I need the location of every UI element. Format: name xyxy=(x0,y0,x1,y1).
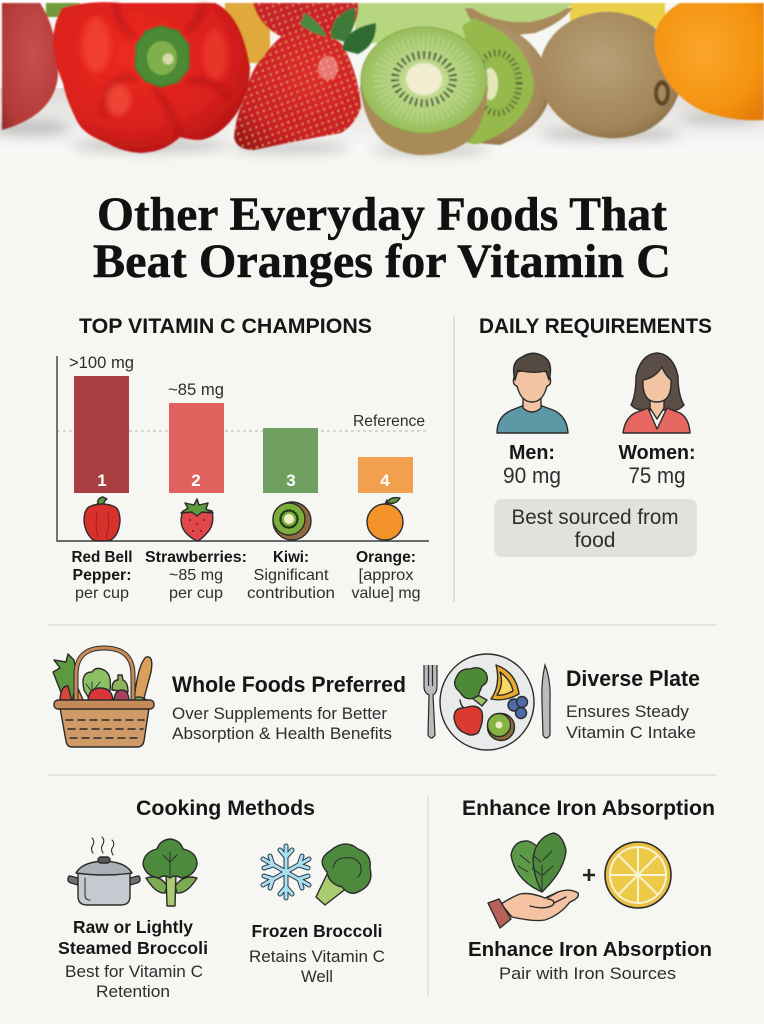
icon: red bell pepper xyxy=(84,497,120,541)
men requirement: Men: xyxy=(509,442,555,464)
bar labels: contribution xyxy=(247,585,335,602)
women requirement: Women: xyxy=(618,442,696,464)
bar labels: Kiwi: xyxy=(273,549,309,566)
bar labels: value] mg xyxy=(352,585,420,602)
icon: strawberry xyxy=(181,499,213,541)
bar labels: [approx xyxy=(358,567,414,584)
icon: steaming pot xyxy=(68,837,140,905)
heading: champions: TOP VITAMIN C CHAMPIONS xyxy=(79,315,372,338)
bar labels: Pepper: xyxy=(72,567,132,584)
heading: cooking methods: Cooking Methods xyxy=(136,796,315,820)
text: pair with iron sources: Pair with Iron Sources xyxy=(499,964,676,983)
bar chart: >100 mg xyxy=(69,353,134,372)
text: pair with iron sources xyxy=(468,939,712,983)
bar labels xyxy=(72,549,420,602)
heading: whole foods preferred: Whole Foods Preferred xyxy=(172,672,406,697)
callout: best sourced from food xyxy=(494,499,697,557)
text: raw or lightly steamed broccoli: Best for Vitamin C xyxy=(65,963,203,981)
icon: fork xyxy=(424,665,437,738)
title xyxy=(93,188,671,288)
icon: woman xyxy=(623,353,690,433)
heading: enhance iron absorption: Enhance Iron Absorption xyxy=(462,796,715,820)
text: ensures steady: Vitamin C Intake xyxy=(566,723,696,742)
icon: man xyxy=(497,353,568,433)
text: frozen broccoli: Well xyxy=(301,968,333,986)
text: pair with iron sources: Enhance Iron Absorption xyxy=(468,939,712,961)
text: frozen broccoli xyxy=(249,921,385,986)
callout: best sourced from food: food xyxy=(574,529,616,552)
panel: top vitamin C champions xyxy=(57,315,429,602)
bar chart: 3 xyxy=(286,471,296,490)
text: raw or lightly steamed broccoli: Steamed Broccoli xyxy=(58,938,208,958)
icon: basket xyxy=(53,648,154,747)
panel: diverse plate xyxy=(424,654,700,750)
women requirement: 75 mg xyxy=(628,463,686,488)
bar labels: Red Bell xyxy=(72,549,132,566)
icon: orange xyxy=(367,498,403,540)
text: frozen broccoli: Frozen Broccoli xyxy=(252,921,382,941)
heading: diverse plate: Diverse Plate xyxy=(566,666,700,691)
bar chart: 2 xyxy=(191,471,201,490)
heading: daily requirements: DAILY REQUIREMENTS xyxy=(479,315,712,338)
bar labels: Orange: xyxy=(356,549,416,566)
bar chart xyxy=(57,353,429,541)
bar labels: per cup xyxy=(75,585,129,602)
panel: enhance iron absorption xyxy=(462,796,715,983)
bar chart: 1 xyxy=(97,471,107,490)
bar labels: Strawberries: xyxy=(145,549,247,566)
icon: snowflake xyxy=(263,846,309,898)
text: raw or lightly steamed broccoli: Retention xyxy=(96,983,170,1001)
hero photo: fruit row xyxy=(0,0,764,170)
icon: knife xyxy=(542,665,550,738)
icon: hand holding spinach xyxy=(488,833,578,928)
bar labels: per cup xyxy=(169,585,223,602)
bar labels: Significant xyxy=(254,567,329,584)
bar chart: Reference xyxy=(353,413,425,430)
text: raw or lightly steamed broccoli xyxy=(58,917,208,1001)
icon: plus xyxy=(583,869,595,881)
text: raw or lightly steamed broccoli: Raw or Lightly xyxy=(73,917,193,937)
panel: whole foods preferred xyxy=(53,648,406,747)
panel: daily requirements xyxy=(479,315,712,557)
bar chart: 4 xyxy=(380,471,390,490)
icon: frozen broccoli xyxy=(316,844,371,905)
panel: cooking methods xyxy=(58,796,385,1001)
women requirement xyxy=(618,442,696,488)
text: ensures steady xyxy=(566,702,696,742)
title: Other Everyday Foods That xyxy=(97,188,667,241)
men requirement: 90 mg xyxy=(503,463,561,488)
text: ensures steady: Ensures Steady xyxy=(566,702,690,721)
text: frozen broccoli: Retains Vitamin C xyxy=(249,948,385,966)
text: over supplements: Over Supplements for Better xyxy=(172,704,387,723)
title: Beat Oranges for Vitamin C xyxy=(93,235,671,288)
icon: plate with foods xyxy=(440,654,534,750)
icon: lemon slice xyxy=(605,842,671,908)
bar labels: ~85 mg xyxy=(169,567,223,584)
icon: leafy broccoli xyxy=(143,839,197,906)
text: over supplements xyxy=(172,704,392,743)
bar chart: ~85 mg xyxy=(168,380,224,399)
callout: best sourced from food: Best sourced from xyxy=(512,506,678,529)
text: over supplements: Absorption & Health Benefits xyxy=(172,724,392,743)
icon: kiwi xyxy=(273,502,311,540)
men requirement xyxy=(503,442,561,488)
